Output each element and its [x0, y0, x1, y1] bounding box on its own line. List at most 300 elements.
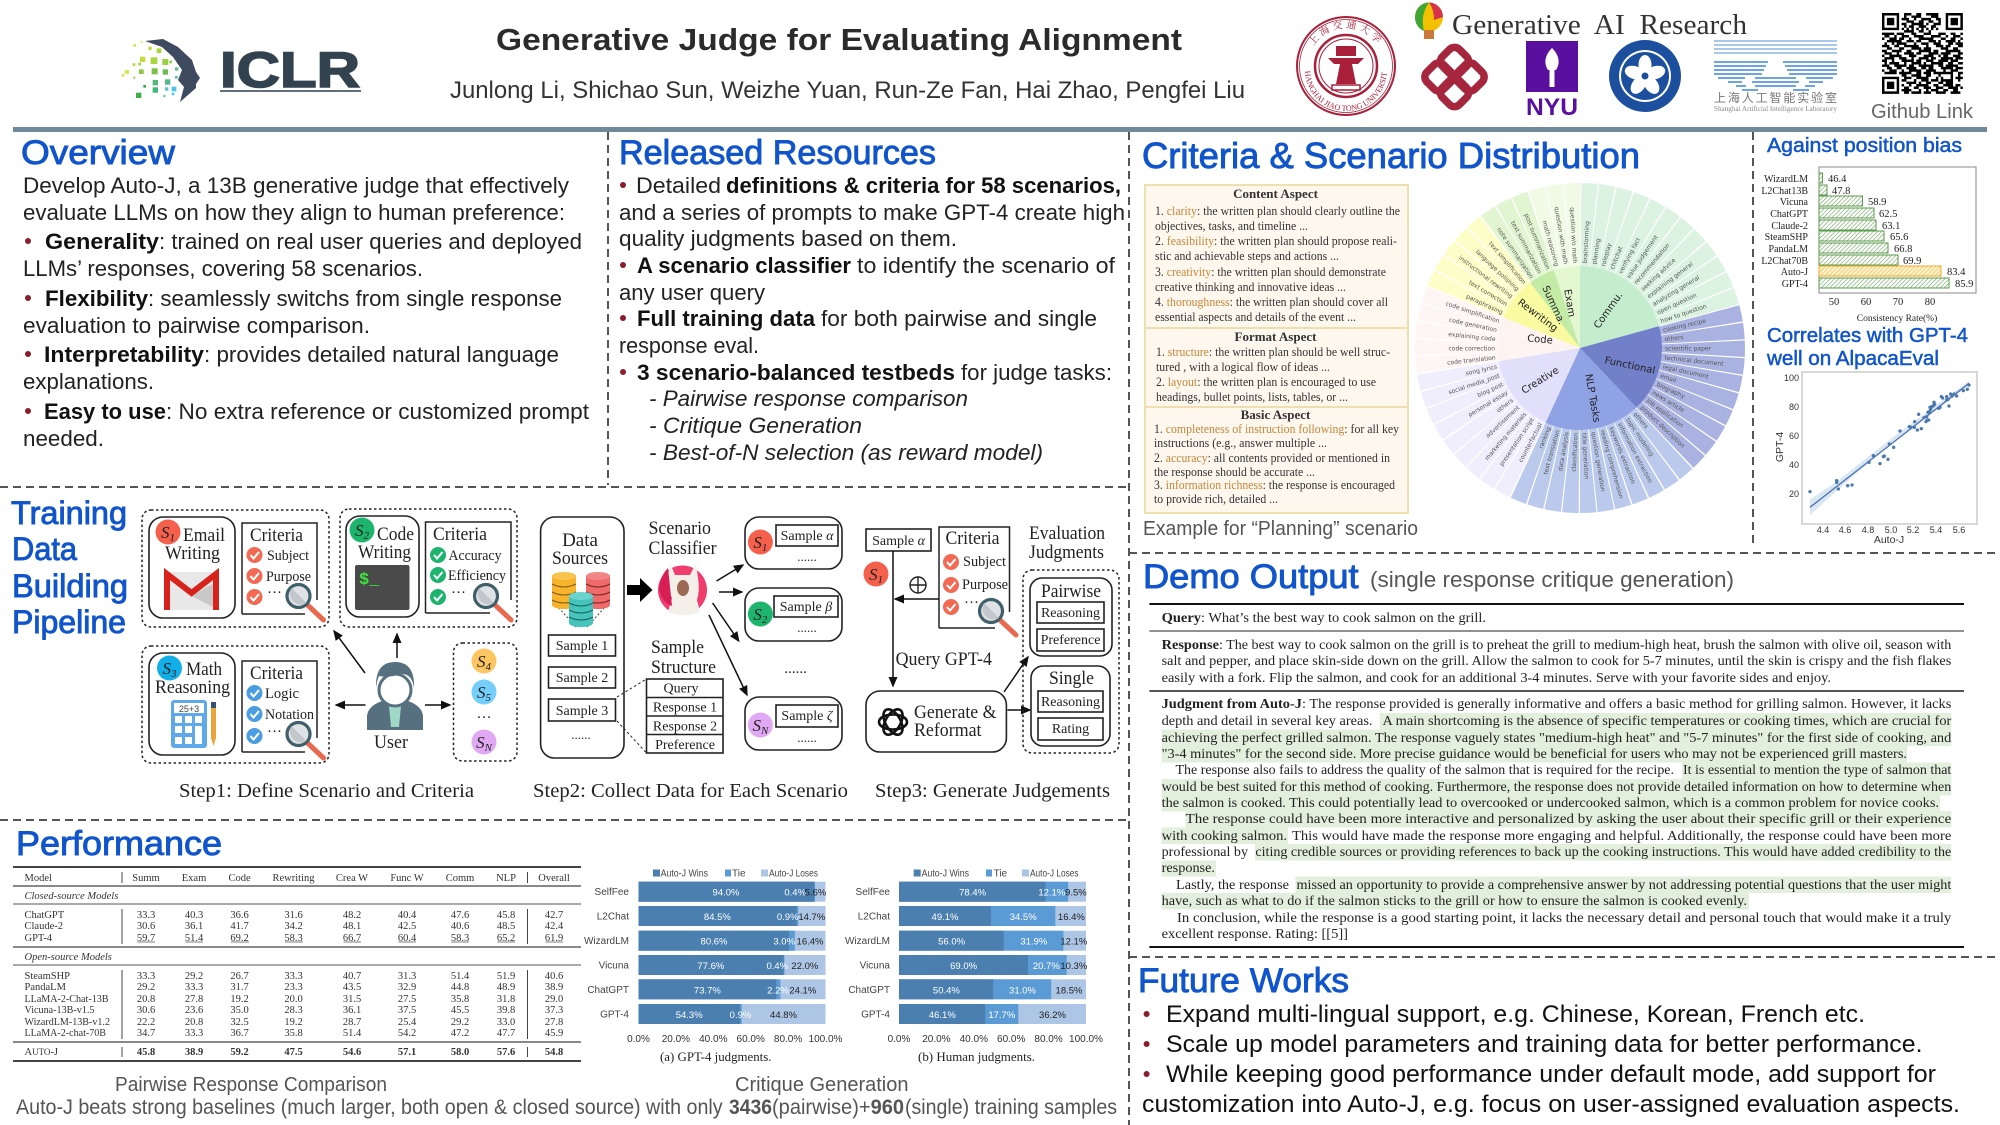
- overview text: explanations.: [23, 369, 154, 394]
- results table: 40.6: [451, 921, 469, 932]
- criteria box: Purpose: [962, 577, 1008, 593]
- stacked bars: human judgments: 10.3%: [1060, 961, 1088, 972]
- results table: 31.7: [230, 982, 249, 993]
- generate and reformat: Reformat: [914, 720, 982, 741]
- sunburst chart: note summarization: [1495, 226, 1535, 280]
- caption: planning example: Example for “Planning” scenario: [1143, 518, 1418, 540]
- sample alpha and query flow: [864, 529, 992, 686]
- resources text: definitions & criteria for 58 scenarios,: [726, 173, 1121, 198]
- criteria example card: 1. completeness of instruction following: for all key: [1154, 421, 1399, 436]
- stacked bars: GPT-4 judgments: 77.6%: [697, 961, 725, 972]
- resources text: - Critique Generation: [649, 413, 862, 438]
- stacked bars: human judgments: 34.5%: [1010, 912, 1037, 923]
- scenario sample groups: ......: [797, 549, 817, 564]
- header rule: [13, 127, 1987, 132]
- stacked bars: GPT-4 judgments: WizardLM: [584, 936, 629, 947]
- heading: future works: Future Works: [1138, 962, 1349, 1000]
- scenario sample groups: S: [753, 605, 762, 624]
- logo: NYU: NYU: [1526, 94, 1578, 121]
- resources text: response eval.: [619, 333, 759, 358]
- heading: correlates: Correlates with GPT-4: [1767, 325, 1968, 347]
- caption: step 2: Step2: Collect Data for Each Scenario: [533, 780, 848, 802]
- results table: 23.3: [284, 982, 303, 993]
- sunburst chart: analyzing general: [1651, 274, 1701, 308]
- results table: 51.4: [185, 933, 204, 944]
- sunburst chart: topic modeling: [1624, 417, 1655, 458]
- stacked bars: human judgments: 100.0%: [1069, 1034, 1103, 1045]
- demo rules: [1149, 604, 1964, 947]
- sunburst chart: post summarization: [1523, 213, 1551, 271]
- results table: AUTO-J: [24, 1047, 58, 1058]
- scenario: email writing: S: [161, 523, 170, 542]
- demo text: : The best way to cook salmon on the grill is to preheat the grill to medium-high heat, brush the salmon with olive oil, season with: [1219, 638, 1951, 653]
- bar chart: consistency rate: WizardLM: [1764, 174, 1808, 185]
- resources text: Detailed: [636, 173, 721, 198]
- bar chart: consistency rate: L2Chat13B: [1761, 186, 1808, 197]
- future works list: Scale up model parameters and training data for better performance.: [1166, 1031, 1922, 1058]
- results table: 54.6: [343, 1047, 361, 1058]
- stacked bars: human judgments: L2Chat: [858, 912, 890, 922]
- sunburst chart: text summarization: [1509, 220, 1543, 275]
- sunburst chart: how to question: [1660, 303, 1708, 325]
- sunburst chart: verifying fact: [1617, 236, 1642, 275]
- stacked bars: human judgments: 36.2%: [1039, 1010, 1067, 1021]
- scenario sample groups: Sample ζ: [781, 709, 834, 724]
- heading: pipeline: Data: [12, 531, 77, 567]
- results table: 47.7: [497, 1028, 515, 1039]
- demo text: In conclusion, while the response is a good starting point, it lacks the necessary detail and personal touch that would make it a truly: [1177, 911, 1951, 926]
- results table: 66.7: [343, 933, 361, 944]
- stacked bars: GPT-4 judgments: (a) GPT-4 judgments.: [660, 1049, 772, 1064]
- sunburst chart: instructional rewriting: [1457, 255, 1514, 300]
- caption: step 3: Step3: Generate Judgements: [875, 780, 1110, 802]
- results table: 28.7: [343, 1017, 361, 1028]
- demo text: Lastly, the response: [1176, 878, 1289, 893]
- stacked bars: GPT-4 judgments: 100.0%: [809, 1034, 843, 1045]
- evaluation judgments: Pairwise: [1041, 581, 1101, 602]
- other scenarios: ···: [476, 710, 492, 726]
- scatter plot: 5.0: [1885, 525, 1897, 535]
- scenario: code writing: 2: [364, 530, 370, 542]
- sunburst chart: Code: [1527, 333, 1553, 347]
- sunburst chart: information extraction: [1616, 422, 1654, 484]
- scatter plot: 4.8: [1862, 525, 1874, 535]
- sunburst chart: question with math: [1553, 206, 1569, 265]
- criteria example card: objectives, tasks, and timeline ...: [1155, 218, 1308, 233]
- resources text: for both pairwise and single: [821, 306, 1097, 331]
- criteria example card: headings, bullet points, lists, tables, or ...: [1156, 389, 1348, 404]
- demo text: "3-4 minutes" for the second side. More precise guidance would be beneficial for users who may not be experienced grill masters.: [1162, 747, 1907, 762]
- heading: pipeline: Training: [11, 495, 127, 531]
- stacked bars: GPT-4 judgments: 0.4%: [766, 961, 789, 972]
- demo text: : What’s the best way to cook salmon on the grill.: [1201, 611, 1486, 626]
- heading: pipeline: [11, 495, 128, 640]
- stacked bars: human judgments: 60.0%: [997, 1034, 1025, 1045]
- other scenarios: S: [477, 652, 486, 671]
- sunburst chart: counterfactual: [1517, 422, 1544, 464]
- scenario: code writing: Criteria: [433, 524, 488, 545]
- results table: 44.8: [451, 982, 469, 993]
- demo text: Query: [1162, 611, 1201, 626]
- step 3: [864, 523, 1119, 802]
- scatter plot: GPT-4: [1774, 432, 1786, 462]
- sunburst chart: text translation: [1542, 429, 1561, 475]
- bar chart: consistency rate: 85.9: [1955, 279, 1973, 290]
- stacked bars: GPT-4 judgments: 73.7%: [694, 986, 721, 996]
- sunburst chart: [1445, 206, 1725, 500]
- sunburst chart: advertisement: [1485, 404, 1522, 440]
- results table: 31.3: [398, 971, 416, 982]
- results table: 33.3: [185, 1028, 203, 1039]
- results table: Overall: [538, 873, 570, 884]
- scatter plot: 100: [1784, 373, 1799, 383]
- results table: 29.2: [451, 1017, 469, 1028]
- criteria example card: 2. feasibility: the written plan should propose reali-: [1155, 233, 1397, 248]
- sunburst chart: open question: [1656, 292, 1698, 316]
- sunburst chart: explaining general: [1646, 261, 1695, 300]
- heading: correlates: [1766, 325, 1968, 370]
- results table: Crea W: [336, 873, 368, 884]
- stacked bars: human judgments: 12.1%: [1038, 888, 1066, 898]
- demo text: the salmon is cooked. This could potentially lead to overcooked or undercooked salmon, which is a common problem for novice cooks.: [1162, 796, 1939, 811]
- results table: Func W: [390, 873, 424, 884]
- stacked bars: GPT-4 judgments: 60.0%: [737, 1034, 765, 1045]
- scenario classifier: [648, 518, 717, 615]
- results table: 40.6: [545, 971, 563, 982]
- stacked bars: GPT-4 judgments: 16.4%: [797, 936, 824, 948]
- scenario: email writing: [142, 510, 329, 627]
- stacked bars: human judgments: GPT-4: [861, 1010, 890, 1020]
- resources text: for judge tasks:: [961, 360, 1112, 385]
- sunburst chart: code correction: [1448, 345, 1495, 352]
- icon: user: User: [374, 732, 409, 753]
- results table: 25.4: [398, 1017, 417, 1028]
- future works list: While keeping good performance under default mode, add support for: [1166, 1061, 1936, 1088]
- results table: 48.1: [343, 921, 361, 932]
- scenario: math reasoning: Criteria: [250, 663, 304, 684]
- results table: 20.0: [284, 994, 303, 1005]
- evaluation judgments: Reasoning: [1041, 606, 1100, 621]
- results table: 30.6: [137, 921, 155, 932]
- sunburst chart: title generation: [1580, 433, 1590, 480]
- sunburst chart: job application: [1644, 397, 1685, 430]
- demo text: The response also fails to address the quality of the salmon that is required for the recipe.: [1176, 763, 1674, 778]
- sunburst chart: news article: [1651, 389, 1686, 414]
- demo text: salt and pepper, and place skin-side down on the grill. Allow the salmon to cook for 5-7 minutes, until the skin is crispy and the fish flakes: [1162, 654, 1951, 669]
- performance summary: 3436: [729, 1096, 772, 1119]
- scatter plot: [1774, 372, 1977, 546]
- results table: Claude-2: [24, 921, 63, 932]
- demo text: The response could have been more interactive and personalized by asking the user about their specific grill or their experience: [1186, 812, 1951, 827]
- results table: [13, 867, 581, 1061]
- sample structure: Response 2: [653, 720, 717, 734]
- stacked bars: human judgments: [845, 868, 1103, 1064]
- bar chart: consistency rate: Vicuna: [1780, 197, 1809, 208]
- sample alpha and query flow: S: [869, 565, 878, 584]
- results table: ChatGPT: [24, 910, 65, 921]
- demo text: This would have made the response more engaging and helpful. Additionally, the response could have been more: [1292, 829, 1951, 844]
- sunburst chart: question generation: [1589, 431, 1606, 492]
- stacked bars: GPT-4 judgments: Vicuna: [599, 960, 629, 972]
- stacked bars: human judgments: 17.7%: [988, 1010, 1016, 1021]
- demo text: excellent response. Rating: [[5]]: [1162, 927, 1348, 942]
- scenario: math reasoning: [142, 646, 329, 763]
- stacked bars: GPT-4 judgments: 44.8%: [770, 1010, 798, 1021]
- sunburst chart: blog post: [1476, 381, 1505, 399]
- demo text: easily with a fork. Flip the salmon, and cook for an additional 3-4 minutes. Serve with your favorite sides and enjoy.: [1162, 671, 1831, 686]
- logo: Shanghai AI Lab: 上海人工智能实验室: [1714, 90, 1837, 105]
- scenario: math reasoning: Math: [186, 659, 222, 680]
- results table: 42.4: [545, 921, 564, 932]
- scatter plot: 80: [1789, 402, 1799, 412]
- results table: 31.5: [343, 994, 361, 1005]
- logo: Shanghai AI Lab: [1714, 41, 1837, 113]
- stacked bars: GPT-4 judgments: 0.9%: [777, 912, 799, 923]
- scenario: email writing: Writing: [165, 543, 220, 564]
- criteria example card: 3. creativity: the written plan should demonstrate: [1155, 264, 1386, 279]
- scenario: math reasoning: Notation: [265, 707, 314, 723]
- stacked bars: GPT-4 judgments: 0.4%: [784, 888, 807, 898]
- header: [122, 2, 1974, 123]
- scenario sample groups: 1: [762, 542, 767, 554]
- scenario: code writing: $_: [359, 571, 380, 590]
- stacked bars: human judgments: (b) Human judgments.: [918, 1049, 1035, 1064]
- sunburst chart: social media_post: [1448, 372, 1501, 396]
- scatter plot: 5.4: [1930, 525, 1942, 535]
- stacked bars: GPT-4 judgments: Tie: [732, 868, 746, 880]
- resources text: A scenario classifier: [637, 253, 851, 278]
- authors: Junlong Li, Shichao Sun, Weizhe Yuan, Run-Ze Fan, Hai Zhao, Pengfei Liu: [450, 77, 1245, 104]
- criteria box: ···: [964, 595, 979, 611]
- heading: position bias: Against position bias: [1767, 135, 1962, 157]
- scenario sample groups: N: [760, 725, 769, 737]
- results table: Code: [229, 873, 251, 884]
- results table: 22.2: [137, 1017, 155, 1028]
- stacked bars: human judgments: Auto-J Wins: [922, 868, 969, 880]
- scenario sample groups: ......: [797, 730, 817, 745]
- overview text: Easy to use: [44, 399, 166, 424]
- sunburst chart: chitchat: [1609, 245, 1625, 271]
- stacked bars: GPT-4 judgments: ChatGPT: [587, 985, 629, 996]
- results table: 48.9: [497, 982, 515, 993]
- resources text: - Pairwise response comparison: [649, 386, 968, 411]
- logo: PolyU knot: [1422, 44, 1487, 110]
- results table: 45.5: [451, 1005, 469, 1016]
- bar chart: consistency rate: ChatGPT: [1770, 209, 1808, 220]
- bar chart: consistency rate: 62.5: [1879, 209, 1897, 220]
- overview text: [23, 173, 589, 451]
- stacked bars: GPT-4 judgments: 24.1%: [789, 986, 817, 996]
- data sources: Sample 3: [556, 704, 608, 719]
- sunburst chart: code generation: [1448, 317, 1498, 334]
- panel: training data pipeline: [11, 495, 1119, 802]
- sunburst chart: others: [1632, 411, 1649, 430]
- evaluation judgments: Reasoning: [1041, 695, 1100, 710]
- bar chart: consistency rate: 69.9: [1903, 256, 1921, 267]
- sample alpha and query flow: Sample α: [872, 534, 926, 549]
- bar chart: consistency rate: Consistency Rate(%): [1857, 313, 1937, 324]
- scenario: code writing: Writing: [358, 542, 411, 563]
- sunburst chart: text simplification: [1487, 240, 1527, 286]
- results table: 47.5: [284, 1047, 303, 1058]
- stacked bars: GPT-4 judgments: [584, 868, 843, 1064]
- scenario sample groups: 2: [762, 614, 768, 626]
- scenario: math reasoning: 3: [170, 668, 177, 680]
- overview text: needed.: [23, 426, 104, 451]
- title: Generative Judge for Evaluating Alignment: [496, 22, 1182, 57]
- panel: criteria & scenario distribution: [1142, 135, 1725, 540]
- criteria example card: Basic Aspect: [1241, 407, 1311, 422]
- panel: overview: [21, 134, 589, 451]
- results table: 36.7: [230, 1028, 249, 1039]
- stacked bars: human judgments: Vicuna: [860, 960, 890, 972]
- stacked bars: human judgments: 46.1%: [929, 1010, 956, 1021]
- bar chart: consistency rate: Claude-2: [1771, 221, 1808, 232]
- evaluation judgments: Single: [1049, 668, 1094, 689]
- results table: 57.6: [497, 1047, 515, 1058]
- results table: 51.4: [343, 1028, 362, 1039]
- performance summary: (pairwise)+: [772, 1096, 871, 1119]
- criteria example card: 4. thoroughness: the written plan should cover all: [1155, 294, 1388, 309]
- panel: future works: [1138, 962, 1960, 1118]
- criteria example card: 2. layout: the written plan is encouraged to use: [1156, 374, 1376, 389]
- results table: 33.0: [497, 1017, 515, 1028]
- sunburst chart: recommendation: [1633, 242, 1671, 286]
- sunburst chart: classification: [1571, 433, 1580, 472]
- caption: pairwise: Pairwise Response Comparison: [115, 1074, 387, 1096]
- sunburst chart: value judgement: [1625, 234, 1660, 280]
- results table: Open-source Models: [24, 952, 112, 963]
- bar chart: consistency rate: 65.6: [1890, 232, 1908, 243]
- stacked bars: human judgments: Auto-J Loses: [1030, 868, 1079, 880]
- logo: CAS: [1609, 40, 1681, 112]
- results table: 29.0: [545, 994, 563, 1005]
- performance summary: [16, 1096, 1117, 1119]
- generate and reformat: Generate &: [914, 702, 997, 723]
- future works list: customization into Auto-J, e.g. focus on user-assigned evaluation aspects.: [1142, 1091, 1960, 1118]
- future works list: Expand multi-lingual support, e.g. Chinese, Korean, French etc.: [1166, 1001, 1865, 1028]
- scatter plot: 4.4: [1817, 525, 1829, 535]
- sunburst chart: Commu.: [1592, 290, 1625, 331]
- bar chart: consistency rate: PandaLM: [1769, 244, 1808, 255]
- results table: 31.8: [497, 994, 515, 1005]
- caption: critique: Critique Generation: [735, 1074, 908, 1096]
- resources text: and a series of prompts to make GPT-4 create high: [619, 200, 1125, 225]
- resources text: [619, 173, 1125, 465]
- scenario: math reasoning: Reasoning: [155, 677, 230, 698]
- scatter plot: 5.6: [1953, 525, 1965, 535]
- stacked bars: human judgments: 31.0%: [1009, 986, 1037, 996]
- sunburst chart: language polishing: [1474, 249, 1520, 293]
- stacked bars: GPT-4 judgments: 54.3%: [676, 1010, 703, 1021]
- sunburst chart: keywords extraction: [1607, 426, 1636, 485]
- criteria example card: instructions (e.g., answer multiple ...: [1154, 435, 1327, 450]
- overview text: : seamlessly switchs from single response: [148, 286, 562, 311]
- stacked bars: human judgments: 78.4%: [959, 888, 987, 898]
- results table: 45.8: [137, 1047, 155, 1058]
- criteria example card: creative thinking and innovative ideas ...: [1155, 279, 1346, 294]
- sunburst chart: code simplification: [1445, 300, 1500, 325]
- results table: 59.7: [137, 933, 155, 944]
- stacked bars: GPT-4 judgments: 14.7%: [798, 912, 826, 923]
- stacked bars: GPT-4 judgments: 22.0%: [791, 961, 819, 972]
- step 1: [142, 509, 517, 802]
- other scenarios: 5: [486, 692, 492, 704]
- criteria box: Subject: [963, 554, 1007, 570]
- sunburst chart: brainstorming: [1582, 221, 1591, 263]
- heading: demo output: Demo Output: [1143, 558, 1359, 596]
- results table: 23.6: [185, 1005, 203, 1016]
- sunburst chart: ranking: [1538, 426, 1553, 450]
- scenario: email writing: Purpose: [266, 569, 311, 585]
- results table: 69.2: [230, 933, 249, 944]
- results table: PandaLM: [24, 982, 67, 993]
- stacked bars: GPT-4 judgments: SelfFee: [595, 887, 629, 898]
- sunburst chart: scientific paper: [1665, 345, 1712, 352]
- demo text: would be best suited for this method of cooking. Furthermore, the response does not provide detailed information on how to determine when: [1162, 780, 1951, 795]
- sunburst chart: legal document: [1662, 364, 1710, 381]
- data sources: Sample 2: [556, 671, 608, 686]
- heading: Released Resources: Released Resources: [619, 134, 936, 172]
- bar chart: consistency rate: 83.4: [1947, 267, 1966, 278]
- scatter plot: 40: [1789, 460, 1799, 470]
- overview text: evaluation to pairwise comparison.: [23, 313, 370, 338]
- stacked bars: GPT-4 judgments: 80.6%: [701, 936, 728, 948]
- sunburst chart: roleplay: [1600, 242, 1613, 267]
- scenario sample groups: Sample β: [780, 600, 832, 615]
- results table: 42.5: [398, 921, 416, 932]
- heading: Overview: Overview: [21, 134, 175, 172]
- sunburst chart: Exam: [1561, 288, 1577, 318]
- stacked bars: human judgments: 56.0%: [938, 936, 966, 948]
- scatter plot: 20: [1789, 489, 1799, 499]
- results table: 45.8: [497, 910, 515, 921]
- results table: Exam: [182, 873, 206, 884]
- results table: 45.9: [545, 1028, 563, 1039]
- icon: user: [367, 662, 423, 753]
- scenario: email writing: Subject: [267, 548, 310, 564]
- scenario: code writing: S: [355, 521, 364, 540]
- performance summary: Auto-J beats strong baselines (much larger, both open & closed source) with only: [16, 1096, 723, 1119]
- overview text: LLMs’ responses, covering 58 scenarios.: [23, 256, 423, 281]
- logo: NYU: [1526, 41, 1578, 121]
- panel: side charts: [1761, 135, 1977, 546]
- demo text: with cooking salmon.: [1162, 829, 1287, 844]
- demo text: have, such as what to do if the salmon sticks to the grill or how to ensure the salmon is cooked evenly.: [1162, 894, 1747, 909]
- results table: 47.2: [451, 1028, 469, 1039]
- evaluation judgments: Judgments: [1029, 542, 1104, 563]
- sunburst chart: cooking recipe: [1662, 318, 1707, 334]
- results table: 37.5: [398, 1005, 416, 1016]
- stacked bars: GPT-4 judgments: 2.2%: [767, 986, 789, 996]
- scenario classifier: Classifier: [648, 538, 717, 559]
- scenario: math reasoning: Logic: [265, 686, 299, 702]
- criteria box: Criteria: [946, 528, 1000, 549]
- results table: 27.5: [398, 994, 416, 1005]
- results table: 33.3: [137, 910, 155, 921]
- scatter plot: 60: [1789, 431, 1799, 441]
- stacked bars: GPT-4 judgments: 94.0%: [713, 888, 740, 898]
- demo text: depth and detail in several key areas.: [1162, 714, 1372, 729]
- heading: pipeline: Building: [12, 568, 128, 604]
- data sources: Sample 1: [556, 639, 608, 654]
- overview text: Generality: [45, 229, 160, 254]
- bar chart: consistency rate: 66.8: [1894, 244, 1912, 255]
- sunburst chart: question w/o math: [1568, 207, 1578, 264]
- heading: performance: Performance: [16, 825, 222, 863]
- scenario: math reasoning: 25+3: [179, 704, 199, 714]
- criteria example card: the response should be accurate ...: [1154, 464, 1315, 479]
